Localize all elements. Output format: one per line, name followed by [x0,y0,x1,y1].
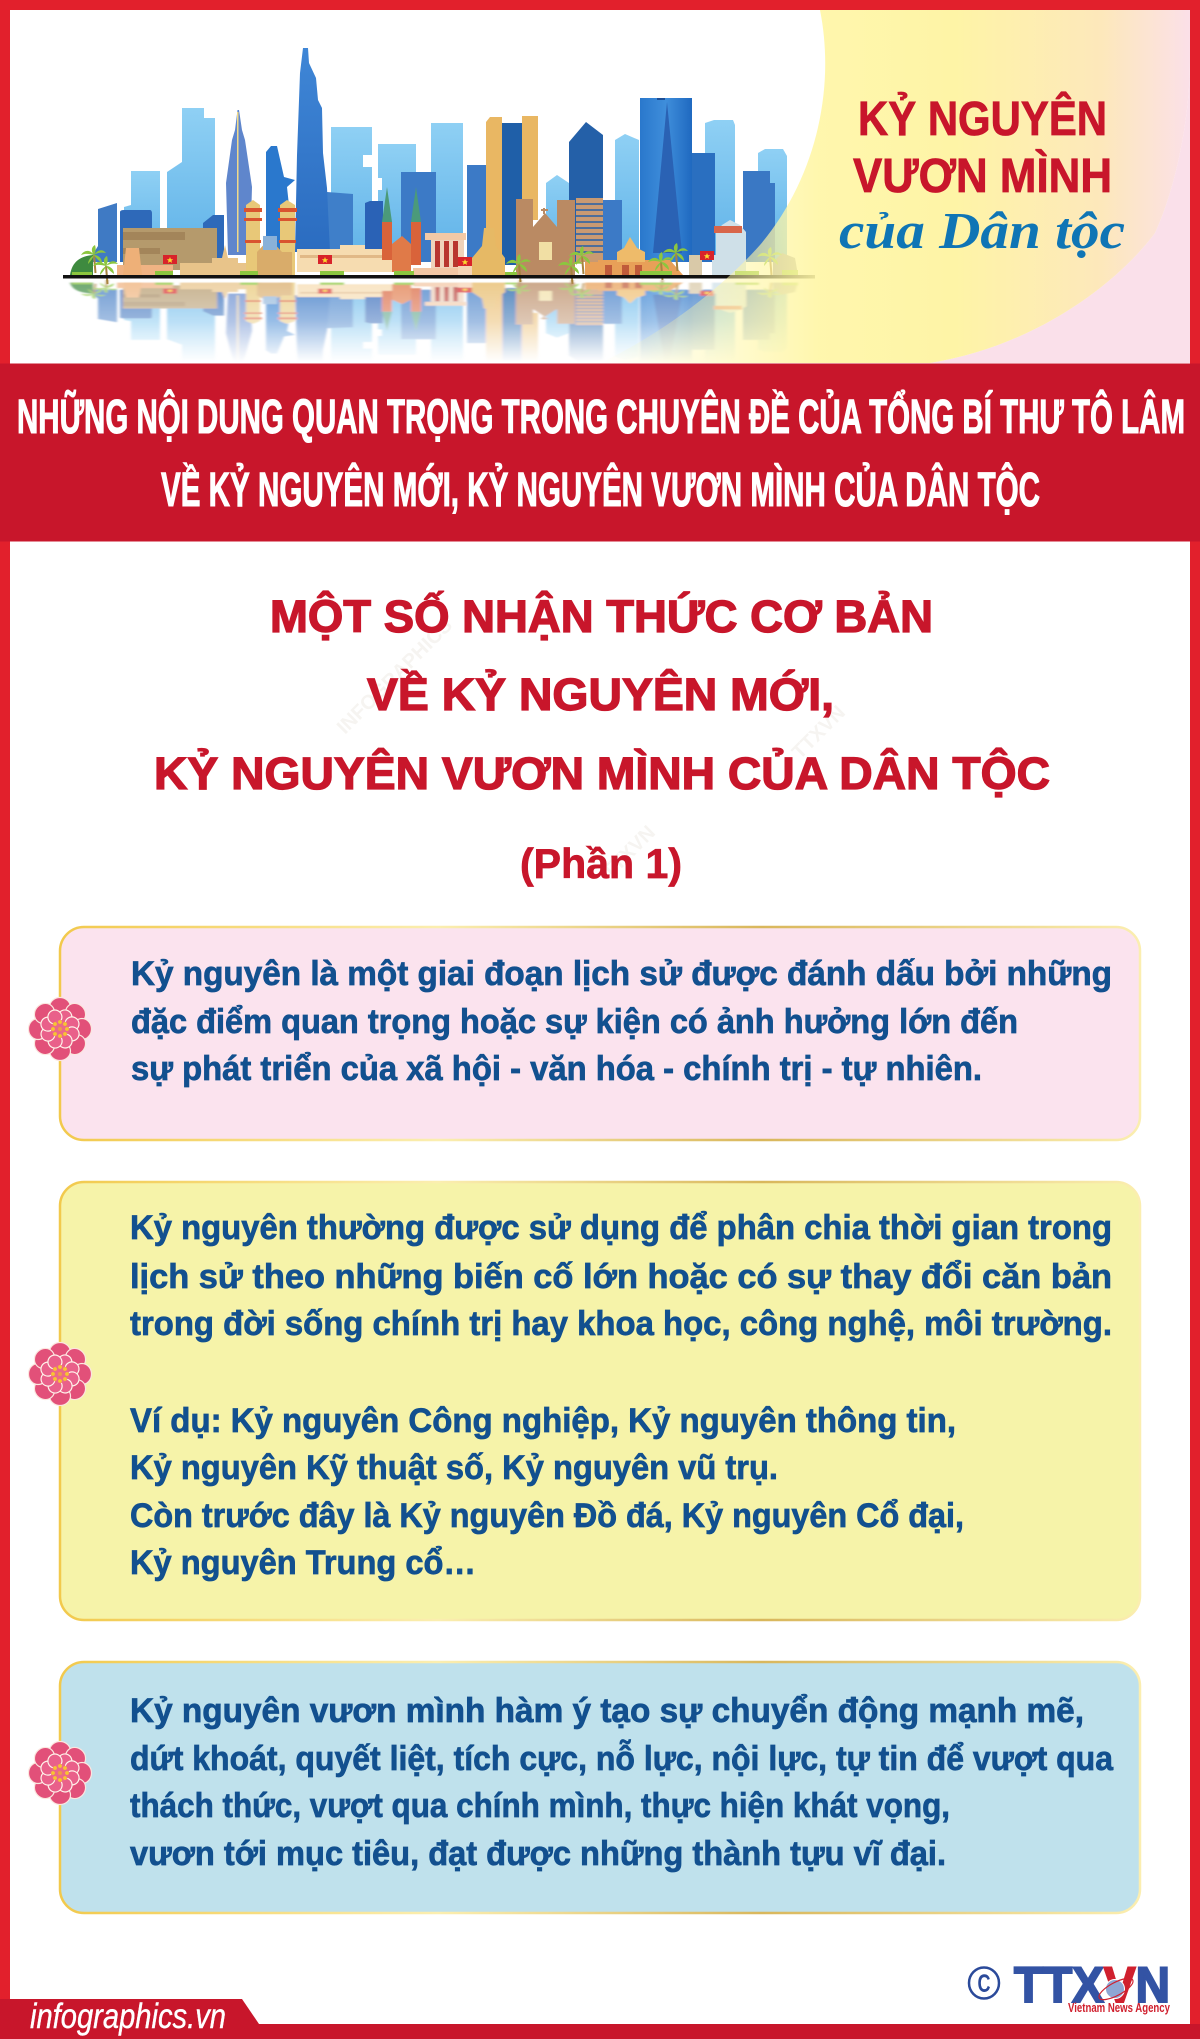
header yellow curve [600,10,1190,363]
watermarks: TTXVN [788,702,850,764]
panel: definition of an era: Kỷ nguyên là một giai đoạn lịch sử được đánh dấu bởi những [131,955,1112,993]
section heading [154,591,1050,887]
header logo text [839,91,1125,260]
logo: copyright TTXVN: Vietnam News Agency [1068,2001,1170,2015]
icon: pink flower 2 [28,1342,92,1406]
header logo text: của Dân tộc [839,203,1125,260]
panel: dividing historical time: Ví dụ: Kỷ nguyên Công nghiệp, Kỷ nguyên thông tin, [130,1402,956,1440]
panel: meaning of rising [60,1662,1140,1913]
title band [0,364,1200,542]
panel: definition of an era [60,927,1140,1140]
footer tab: infographics.vn: infographics.vn [30,1997,226,2036]
panel: dividing historical time: Kỷ nguyên Kỹ thuật số, Kỷ nguyên vũ trụ. [130,1449,778,1487]
panel: dividing historical time: Kỷ nguyên thường được sử dụng để phân chia thời gian trong [130,1209,1112,1247]
header logo text: VƯƠN MÌNH [853,149,1112,203]
panel: meaning of rising: dứt khoát, quyết liệt, tích cực, nỗ lực, nội lực, tự tin để vượt qua [130,1740,1114,1778]
panel: meaning of rising: vươn tới mục tiêu, đạt được những thành tựu vĩ đại. [130,1835,946,1873]
panel: meaning of rising: Kỷ nguyên vươn mình hàm ý tạo sự chuyển động mạnh mẽ, [130,1692,1084,1730]
panel: meaning of rising: thách thức, vượt qua chính mình, thực hiện khát vọng, [130,1787,950,1825]
header corner: pink backdrop [930,60,1190,363]
header logo text: KỶ NGUYÊN [858,91,1107,146]
footer band [0,2024,1200,2039]
section heading: (Phần 1) [520,840,682,887]
illustration: skyline water reflection [68,280,798,359]
icon: pink flower 1 [28,998,92,1060]
illustration: city skyline [63,48,815,284]
panel: definition of an era: đặc điểm quan trọng hoặc sự kiện có ảnh hưởng lớn đến [131,1003,1018,1041]
watermarks: INFOGRAPHICS [333,615,457,739]
panel: dividing historical time: lịch sử theo những biến cố lớn hoặc có sự thay đổi căn bản [130,1258,1112,1296]
panel: dividing historical time: Còn trước đây là Kỷ nguyên Đồ đá, Kỷ nguyên Cổ đại, [130,1497,964,1535]
watermarks: TTXVN [598,822,660,884]
watermarks [333,615,850,884]
section heading: MỘT SỐ NHẬN THỨC CƠ BẢN [270,591,933,642]
panel: dividing historical time [60,1182,1140,1620]
panel: dividing historical time: Kỷ nguyên Trung cổ… [130,1544,476,1582]
logo: copyright TTXVN: TTXVN [1014,1957,1170,2013]
logo: copyright TTXVN: C [978,1970,990,1998]
icon: pink flower 3 [28,1742,92,1804]
section heading: VỀ KỶ NGUYÊN MỚI, [367,669,834,720]
panel: definition of an era: sự phát triển của xã hội - văn hóa - chính trị - tự nhiên. [131,1050,982,1088]
section heading: KỶ NGUYÊN VƯƠN MÌNH CỦA DÂN TỘC [154,748,1050,799]
panel: dividing historical time: trong đời sống chính trị hay khoa học, công nghệ, môi trường. [130,1305,1112,1343]
